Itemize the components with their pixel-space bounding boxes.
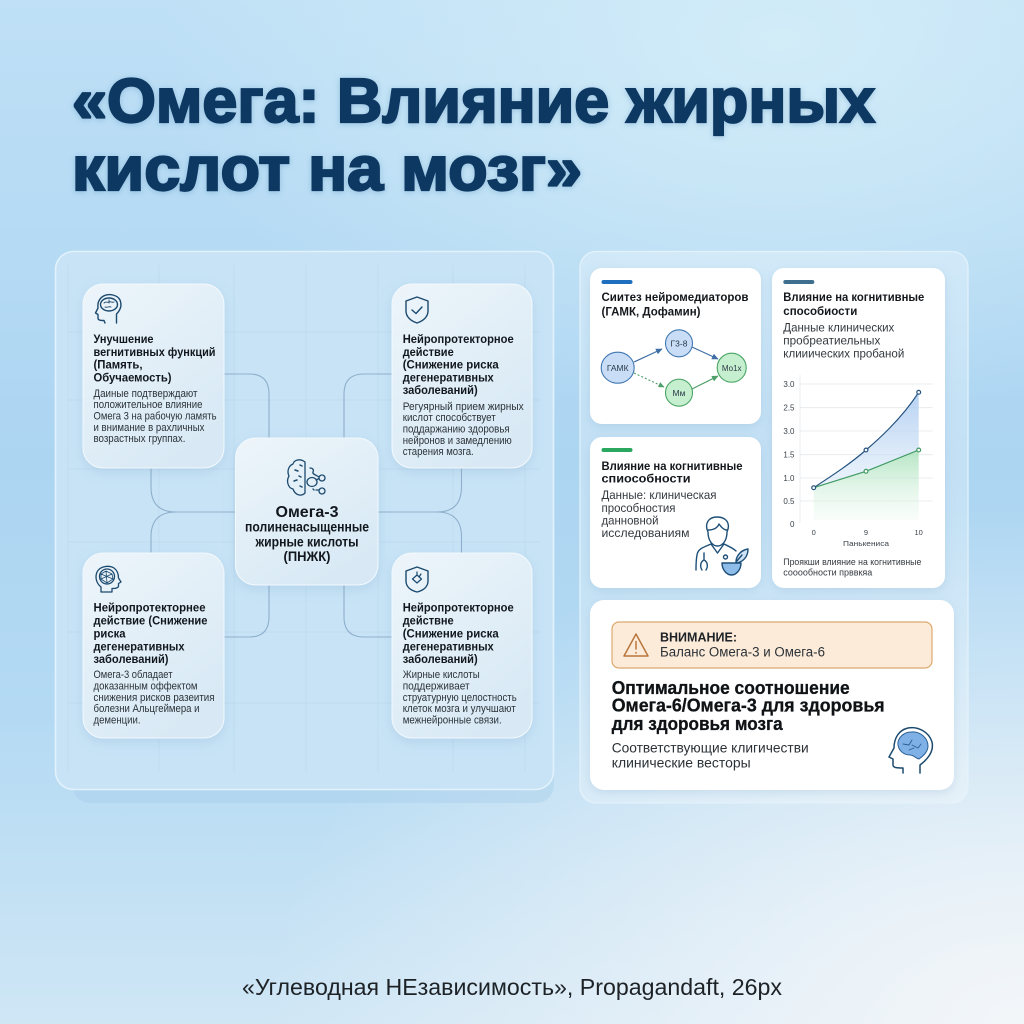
body text [783,320,904,360]
title: кислот на мозг» [72,135,582,204]
accent bar [783,280,814,284]
icon: shield check [406,297,428,323]
line chart: 9 [864,528,868,537]
line chart [783,375,932,548]
heading: Нейропротекторное [403,332,514,346]
panel: left glass diagram [56,252,554,803]
pathway diagram: ГАМК [607,363,629,373]
callout: warning: Баланс Омега-3 и Омега-6 [660,645,825,660]
heading: Влияние на когнитивные [783,290,925,304]
heading: (Снижение риска [403,626,499,640]
body text: межнейронные связи. [403,714,502,726]
heading: Обучаемость) [94,370,172,384]
chart caption: соооoбности прввкяа [783,568,872,578]
card: omega balance [590,600,954,790]
body text: и внимание в рахличных [94,422,205,434]
icon: head with blue brain [889,728,932,773]
heading: спиособности [602,472,690,486]
body text [403,401,524,458]
title: «Омега: Влияние жирных [72,67,876,136]
heading: действне [403,614,454,628]
card: neuroprotection bottom left [83,553,224,738]
line chart: 0 [790,520,795,529]
body text: струатурную целостность [403,692,517,704]
body text: клииических пробаной [783,346,904,360]
card: cognitive, doctor [590,437,761,588]
body text: старения мозга. [403,446,474,458]
pathway diagram: Мо1х [722,364,742,373]
heading: дегенеративных [94,640,185,654]
line chart: 2.5 [783,404,795,413]
body text: поддаржанию здоровья [403,424,510,436]
pathway diagram: Г3-8 [671,338,688,348]
heading [783,290,925,318]
body text: доказанным оффектом [94,680,198,692]
pathway diagram: Мм [673,388,686,398]
line chart: 0.5 [783,497,795,506]
icon: shield with mark [406,567,428,592]
heading: Нейропротекторное [403,601,514,615]
connectors [151,374,462,637]
heading [602,290,748,318]
heading: (Память, [94,358,142,372]
heading: Нейропротекторнее [94,601,206,615]
icon: head with neural brain [96,566,121,592]
card: neuroprotection top [392,284,532,468]
center label: Омега-3 [276,504,339,521]
center label: (ПНЖК) [284,549,330,564]
callout: warning: ВНИМАНИЕ: [660,631,737,645]
body text: Регуярный прием жирных [403,401,524,413]
body text: Соответствующие клигичестви [612,739,809,755]
heading: риска [94,626,126,640]
line chart: 3.0 [783,380,795,389]
card: cognitive chart [772,268,945,588]
chart caption: Проякши влияние на когнитивные [783,557,921,567]
heading: Сиитез нейромедиаторов [602,290,748,304]
icon: warning triangle [624,634,648,656]
title [72,67,876,204]
body text [602,488,716,540]
line chart: 0 [812,528,816,537]
heading [403,601,514,666]
heading: Влияние на когнитивные [602,459,743,473]
accent bar [602,280,632,284]
body text: положительное влияние [94,399,202,411]
body text [94,388,217,445]
heading: дегенеративных [403,370,494,384]
accent bar [602,448,632,452]
heading: заболеваний) [403,652,478,666]
line chart: 1.0 [783,474,795,483]
heading: заболеваний) [403,383,478,397]
heading [612,678,885,734]
card: cognitive functions [83,284,224,468]
line chart: 3.0 [783,427,795,436]
body text: болезни Альцгеймера и [94,703,200,715]
icon: doctor with bowl [696,517,748,575]
body text [94,669,214,726]
heading: Оптимальное соотношение [612,678,850,698]
body text: Данные: клиническая [602,488,716,502]
body text [403,669,517,726]
body text: Данные клинических [783,320,895,334]
heading: (Снижение риска [403,358,499,372]
card: neuroprotection bottom right [392,553,532,738]
body text: деменции. [94,714,140,726]
line chart: Панькениса [843,539,890,548]
heading [403,332,514,397]
body text: снижения рисков разеития [94,692,214,704]
heading [94,601,208,666]
body text: нейронов и замедлению [403,435,512,447]
center label [245,504,369,564]
heading [602,459,743,486]
chart caption [783,557,921,578]
body text: кислот способствует [403,412,496,424]
body text: поддерживает [403,680,470,692]
body text: Омега 3 на рабочую ламять [94,410,217,422]
card: center Omega-3 [236,438,378,585]
heading: вегнитивных функций [94,345,216,359]
pathway diagram [601,330,746,406]
center label: полиненасыщенные [245,520,369,535]
body text: данновной [602,514,659,528]
icon: head with brain [96,295,121,323]
heading: Унучшение [94,332,154,346]
body text: Даиные подтверждают [94,388,198,400]
center label: жирные кислоты [255,535,358,550]
line chart: 10 [915,528,923,537]
footer credit: «Углеводная НЕзависимость», Propagandaft, 26px [242,974,782,1000]
heading: для здоровья мозга [612,714,784,734]
body text [612,739,809,771]
body text: Жирные кислоты [403,669,480,681]
body text: пробреатиельных [783,333,881,347]
heading: Омега-6/Омега-3 для здоровья [612,696,885,716]
body text: исследованиям [602,526,690,540]
heading [94,332,216,384]
callout: warning [612,622,932,668]
heading: способиости [783,304,857,318]
heading: действие (Снижение [94,614,208,628]
heading: действие [403,345,454,359]
body text: пpособностия [602,501,676,515]
panel: right glass [580,252,968,803]
icon: brain and molecule [288,460,325,495]
card: neurotransmitter synthesis [590,268,761,424]
body text: клинические весторы [612,755,751,771]
body text: возрастных группах. [94,433,186,445]
heading: дегенеративных [403,640,494,654]
body text: Омега-3 обладает [94,669,172,681]
heading: заболеваний) [94,652,168,666]
body text: клеток мозга и улучшают [403,703,516,715]
heading: (ГАМК, Дофамин) [602,304,700,318]
line chart: 1.5 [783,451,795,460]
